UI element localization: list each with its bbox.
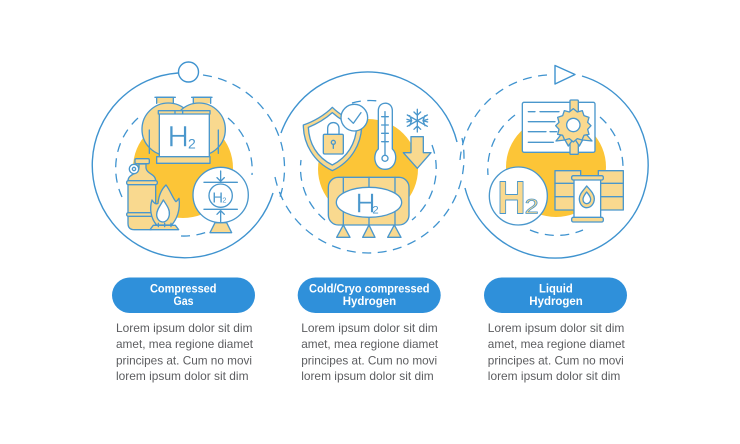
outer dashed arc	[203, 75, 285, 197]
text block: column 2: amet, mea regione diamet	[301, 337, 439, 351]
icon: hydrogen tank: 2	[372, 204, 379, 216]
icon: oil barrels	[555, 171, 623, 222]
text block: column 3: amet, mea regione diamet	[488, 337, 625, 351]
icon: H2 badge: 2	[525, 195, 539, 218]
pill: Compressed Gas: Compressed	[150, 284, 216, 296]
pill: Liquid Hydrogen: Liquid	[539, 284, 573, 296]
text block: column 3: principes at. Cum no movi	[488, 354, 624, 368]
icon: certificate	[522, 100, 595, 154]
text block: column 1: amet, mea regione diamet	[116, 337, 254, 351]
text block: column 1: lorem ipsum dolor sit dim	[116, 369, 248, 383]
inner dashed ring	[300, 101, 436, 220]
icon: compressed sphere	[193, 167, 248, 233]
icon: storage tank	[142, 97, 225, 163]
icon: H2 badge	[489, 167, 547, 225]
icon: compressed sphere: H	[212, 190, 223, 206]
text block: column 2	[301, 321, 439, 383]
pill: Liquid Hydrogen: Hydrogen	[529, 296, 583, 308]
icon: gas cylinder	[127, 159, 157, 230]
pill: Compressed Gas	[112, 278, 255, 313]
inner dashed ring	[116, 118, 252, 236]
icon: thermometer	[375, 103, 396, 169]
pill: Compressed Gas: Gas	[174, 296, 194, 308]
yellow backdrop circle	[318, 119, 418, 219]
outer solid ring	[92, 73, 273, 258]
marker: triangle	[555, 66, 575, 84]
icon: down arrow	[403, 137, 431, 168]
outer solid ring	[465, 76, 648, 258]
text block: column 1: Lorem ipsum dolor sit dim	[116, 321, 252, 335]
text block: column 1: principes at. Cum no movi	[116, 354, 252, 368]
icon: flame burner	[150, 185, 179, 230]
yellow backdrop circle	[506, 117, 606, 217]
text block: column 1	[116, 321, 254, 383]
text block: column 3: lorem ipsum dolor sit dim	[488, 369, 620, 383]
icon: storage tank: H	[168, 121, 189, 154]
icon: hydrogen tank	[328, 177, 409, 237]
icon: shield with lock and check	[303, 104, 368, 171]
panel: liquid hydrogen	[460, 66, 648, 258]
outer solid arc	[281, 72, 457, 142]
text block: column 2: lorem ipsum dolor sit dim	[301, 369, 434, 383]
marker: circle	[178, 62, 198, 82]
icon: storage tank: 2	[188, 135, 196, 151]
outer dashed arc	[275, 138, 464, 253]
text block: column 3	[488, 321, 625, 383]
inner dashed ring	[488, 115, 623, 235]
yellow backdrop circle	[133, 118, 233, 218]
text block: column 3: Lorem ipsum dolor sit dim	[488, 321, 624, 335]
outer dashed arc	[460, 75, 547, 160]
icon: hydrogen tank: H	[356, 188, 376, 219]
pill: Cold/Cryo compressed Hydrogen: Hydrogen	[343, 296, 396, 308]
icon: snowflake	[407, 109, 428, 132]
pill: Cold/Cryo compressed Hydrogen: Cold/Cryo compressed	[309, 284, 430, 296]
panel: compressed gas	[92, 62, 285, 258]
text block: column 2: Lorem ipsum dolor sit dim	[301, 321, 438, 335]
icon: compressed sphere: 2	[222, 196, 226, 205]
text block: column 2: principes at. Cum no movi	[301, 354, 437, 368]
icon: H2 badge: H	[497, 171, 526, 223]
pill: Cold/Cryo compressed Hydrogen	[298, 278, 441, 313]
pill: Liquid Hydrogen	[484, 278, 627, 313]
panel: cold/cryo compressed hydrogen	[275, 72, 464, 253]
